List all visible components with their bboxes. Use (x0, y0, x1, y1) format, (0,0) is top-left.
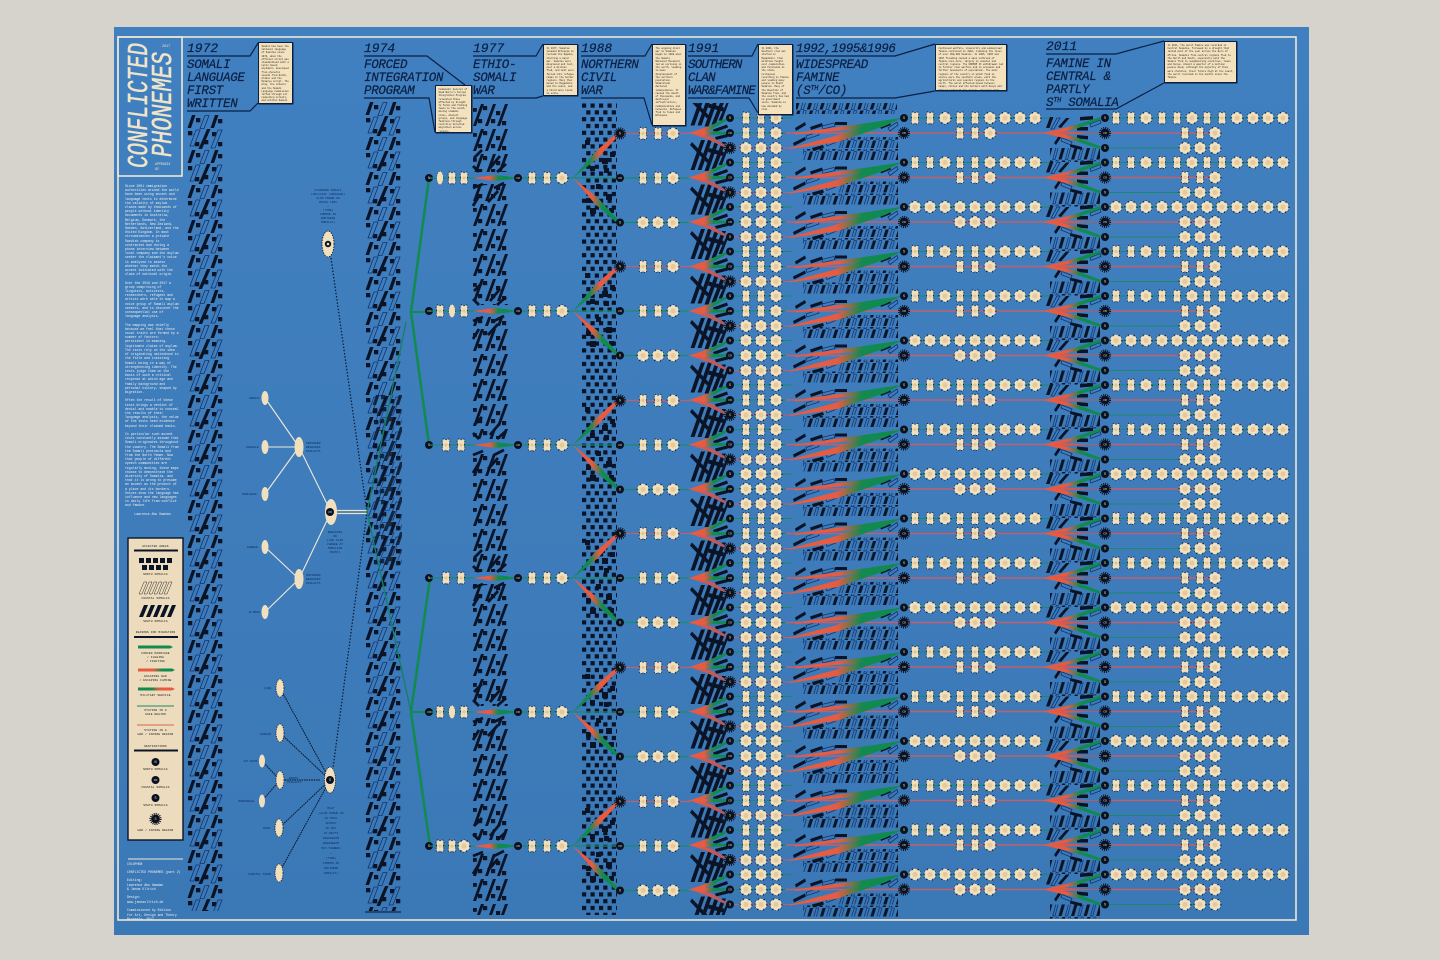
dialect tree: central and northern branches: BENAADIR (328, 531, 342, 534)
dialect tree: central and northern branches: SOMALIAN (328, 547, 342, 550)
legend panel: / FLEEING (147, 655, 164, 659)
dialect tree: Maay branch: MAAY (327, 807, 335, 810)
heading: 1972: 1972 (187, 41, 218, 56)
dialect tree: central and northern branches (242, 391, 367, 619)
dialect tree: Maay branch (238, 679, 344, 882)
legend panel: COASTAL SOMALIA (141, 597, 170, 600)
dialect tree: Maay branch: MUDDOWALE (238, 800, 254, 803)
column: 1974 pattern (365, 102, 402, 912)
column: 1977 pattern (472, 103, 508, 915)
heading: 1974: INTEGRATION (364, 71, 444, 85)
dialect tree: central and northern branches: COAST) (330, 550, 341, 554)
dialect: standard Somali: MAXAA TIRI (319, 201, 337, 204)
dialect tree: Maay branch: SOMALIA) (324, 871, 338, 875)
introduction text: Over the 2016 and 2017 a group comprising of linguists, activists, researchers, refugees and artists were able to map a voice group of Somali asylum seekers, and to discover the consequential use of language analysis. (125, 281, 179, 318)
colophon text: Editing: (127, 878, 142, 882)
introduction text: The mapping was chiefly because we feel that these vocal traits are formed by a number of factors: persistent in meaning-legitimate claims of asylum. The tests rely on the idea of originating nationhood in the field and insisting Somali being in a way of strengthening identity. The tests judge them on the basis of such a critical response at which age and family background and personal history, shaped by migration. (125, 323, 179, 394)
introduction text: Often the result of these tests brings a verdict of denial and unable to conceal the results of their language analysis, the value of the tests need evidence beyond their claimed basis. (125, 398, 179, 428)
migration fans: 1992, 1995 and 1996 (786, 111, 1050, 916)
heading: 1988: CIVIL (581, 71, 617, 85)
legend panel: WAR / FAMINE REGION (138, 828, 174, 832)
heading: 2011: SOMALIA (1061, 96, 1119, 110)
migration branches: 1977 and 1988 (430, 126, 690, 896)
heading: 1977: ETHIO- (473, 58, 516, 72)
dialect tree: Maay branch: COMMON IN (323, 862, 339, 865)
dialect: standard Somali (311, 189, 367, 768)
dialect tree: central and northern branches: DARLUGAN (242, 493, 257, 496)
heading: 1988 (581, 41, 652, 125)
dialect tree: Maay branch: (ALSO KNOWN AS (318, 811, 344, 815)
dialect tree: central and northern branches: BENAADIR (306, 578, 321, 581)
dialect tree: Maay branch: BANTU (289, 777, 298, 780)
heading: 2011: 2011 (1046, 39, 1077, 54)
dialect tree: central and northern branches: CHANGE AT (327, 543, 343, 546)
poster background (114, 27, 1309, 935)
legend panel: WAR / FAMINE REGION (138, 732, 174, 736)
dialect: standard Somali: (OFFICIAL LANGUAGE) (311, 192, 345, 196)
heading: 1988: WAR (581, 84, 603, 98)
note: 1988: The ongoing civil war in Somalia began in 1988 when the Somali National Movement led an uprising in the north, leading to mass displacement of the northern population. Somaliland declared independence. It caused the death of thousands, and destroyed infrastructure, communication and networks. Refugees fled to Yemen and Ethiopia. (656, 47, 681, 117)
column: 1991 pattern (689, 103, 730, 915)
heading: 1992, 1995 and 1996 (796, 42, 935, 98)
legend panel: SOUTH SOMALIA (143, 804, 168, 807)
introduction text: Since 2001 immigration authorities around the world have been using accent and language tests to determine the validity of asylum claims made by thousands of people without identity documents in Australia, Belgium, Denmark, the Netherlands, New Zealand, Sweden, Switzerland, and the United Kingdom. In most circumstances a private Swedish company is contracted and during a phone interview between local company and the asylum seeker the claimant's voice is analysed to assess whether they match the accent indicated with the claim of national origin. (125, 184, 179, 276)
heading: 1972: SOMALI (187, 58, 231, 72)
colophon text: COLOPHON (127, 862, 142, 866)
colophon text: CONFLICTED PHONEMES (part 2) (127, 870, 181, 874)
title block (118, 37, 182, 176)
migration fans: 1991 (688, 111, 792, 910)
dialect: standard Somali: COMMON IN (320, 213, 336, 216)
legend panel: NORTH SOMALIA (143, 573, 168, 576)
dialect tree: Maay branch: SOUTHERN (324, 867, 338, 870)
legend panel: COASTAL SOMALIA (141, 786, 170, 789)
note: 1977: In 1977, Somalia invaded Ethiopia to reclaim the Ogaden, starting a major war. Somalis were displaced and lost, over a million fled, and most were forced into refugee camps in the border regions. Many then moved to Mogadishu and the coast, and a third more lived in exile. (546, 47, 574, 95)
heading: 1974: PROGRAM (364, 84, 415, 98)
legend panel: STAYING IN A (144, 729, 167, 732)
heading: 1977: WAR (473, 84, 495, 98)
legend panel: MILITARY SERVICE (140, 694, 171, 697)
colophon text: Design: (127, 895, 140, 899)
legend panel: SOUTH SOMALIA (143, 620, 168, 623)
colophon text: for Art, Design and Theory (127, 913, 177, 917)
heading: 1977 (473, 41, 543, 98)
migration fans: 2011 (1043, 111, 1289, 918)
dialect tree: central and northern branches: DIALECTS (306, 582, 321, 585)
colophon text: www.jannaullrich.de (127, 900, 163, 904)
migration trunk lines (367, 178, 430, 846)
colophon text: Commissioned by Edition (127, 908, 171, 912)
dialect tree: Maay branch: JIT-NUUS (243, 760, 258, 763)
heading: 1974: 1974 (364, 41, 395, 56)
heading: 1992, 1995 and 1996: (S (796, 84, 810, 98)
heading: 1974: FORCED (364, 58, 408, 72)
heading: 1991: SOUTHERN (688, 58, 743, 72)
dialect tree: central and northern branches: B.MOGO (249, 611, 260, 614)
introduction text (125, 184, 179, 516)
dialect tree: central and northern branches: GARBAD (247, 546, 258, 549)
heading: 2011 (1046, 39, 1164, 110)
heading: 2011: S (1046, 96, 1053, 110)
dialect: standard Somali: SOMALIA) (321, 220, 335, 224)
heading: 1991: WAR&FAMINE (688, 84, 756, 98)
dialect: standard Somali: ALSO KNOWN AS (316, 197, 340, 200)
dialect tree: Maay branch: AFMAAY (326, 822, 337, 825)
legend panel: SAFE REGION (145, 713, 166, 716)
dialect tree: Maay branch: AF-MAY (326, 827, 337, 830)
column: 1992 top bars (796, 103, 897, 114)
dialect tree: Maay branch: GARAAD (260, 733, 271, 736)
legend panel: REASONS FOR MIGRATION (136, 631, 175, 634)
dialect tree: Maay branch: LUUQ (264, 687, 271, 690)
legend panel: FORCED MARRIAGE (141, 652, 170, 655)
heading: 1972: WRITTEN (187, 97, 238, 111)
dialect tree: Maay branch: AF-MAAY (325, 817, 337, 820)
heading: 2011: PARTLY (1046, 83, 1091, 97)
poster frame (118, 37, 1296, 920)
dialect: standard Somali: NORTHERN (321, 217, 335, 220)
heading: 1974 (364, 41, 465, 132)
heading: 1977: SOMALI (473, 71, 517, 85)
heading: 1991: 1991 (688, 41, 719, 56)
accent glyph rows after first node (435, 171, 470, 853)
first nodes (425, 174, 433, 850)
heading: 2011: TH (1053, 97, 1062, 105)
dialect tree: central and northern branches: NORTHERN (306, 442, 321, 445)
legend panel: NORTH SOMALIA (143, 768, 168, 771)
dialect tree: central and northern branches: SOUTHERN (306, 574, 321, 577)
heading: 1992, 1995 and 1996: TH (810, 85, 819, 93)
title block: 02 (155, 167, 159, 171)
legend panel (128, 538, 183, 840)
dialect tree: Maay branch: COASTAL TUNNI (248, 873, 272, 876)
legend panel: / ESCAPING FAMINE (139, 678, 172, 682)
dialect tree: Maay branch: AF-REYTI (324, 832, 338, 835)
introduction text: In particular such accent tests constantly assume that Somali originates throughout the country. The Somali from the Somali peninsula and from the North Yemen. Now that people of different speech communities are regularly moving, these maps choose to demonstrate the diversity of Somalia, and that it is wrong to presume an accent as the product of a place and its borders. Voices show the language has influence and new languages in daily life from conflict and famine. (125, 432, 179, 507)
title block: PHONEMES (147, 52, 180, 157)
note: 1974: Commander General of Siad Barre's Forced Integration Program relocated those affected by drought to farms and fishing towns in the south, mixing nomadic clans, dialect groups, and language families through centrally directed migration across regions. (438, 88, 467, 133)
heading: 1972: FIRST (187, 84, 224, 98)
legend panel: AFFECTED AREAS (142, 545, 169, 548)
dialect tree: Maay branch: — (329, 852, 332, 855)
heading: 1992, 1995 and 1996: 1992,1995&1996 (796, 42, 896, 56)
heading: 1992, 1995 and 1996: /CO) (818, 84, 847, 98)
dialect: standard Somali: STANDARD SOMALI (314, 189, 342, 192)
dialect tree: Maay branch: (TIME) (326, 856, 337, 860)
heading: 1992, 1995 and 1996: FAMINE (796, 71, 840, 85)
colophon text: Lawrence Abu Hamdan (127, 883, 163, 887)
title block: 2017 (162, 45, 171, 49)
colophon text: & Janna Ullrich (127, 887, 156, 891)
heading: 1972: LANGUAGE (187, 71, 245, 85)
dialect tree: central and northern branches: (CAN ALSO (327, 538, 343, 542)
colophon text (127, 862, 181, 921)
dialect tree: Maay branch: RAHANWEYN (323, 837, 339, 840)
dialect: standard Somali: — (326, 205, 329, 208)
dialect tree: central and northern branches: DIALECTS (306, 450, 321, 453)
legend panel: ESCAPING WAR (144, 675, 167, 678)
colophon rule (128, 858, 183, 860)
legend panel: DESTINATIONS (144, 745, 167, 748)
dialect tree: central and northern branches: UROAVI (249, 397, 260, 400)
note: 1991: In 1991, the Southern clan war started in Mogadishu. Clan militias fought over communities and farmlands as the state collapsed, resulting in famine and leading many people to South Somalia. Many of the Republic of Somalia fled, and the country has had no government since. Somalia is now divided by clan. (762, 47, 789, 111)
heading: 1991: CLAN (688, 71, 716, 85)
note: 1988 (652, 44, 686, 126)
heading: 1991 (688, 41, 758, 113)
heading: 1988: NORTHERN (581, 58, 639, 72)
heading: 1988: 1988 (581, 41, 612, 56)
column: 1972 pattern (187, 115, 223, 911)
note: 2011: In 2011, the worst famine was recorded in Central Somalia, followed by a drought that lasted most of the year across the Horn of Africa. Somalis from central regions fled to the North and South, especially with the Somali fled to neighbouring countries, Yemen and Kenya. Almost a quarter of a million people died, although the majority of them were children, their future high at the coast, the worst recorded in the months since the famine. (1168, 44, 1234, 79)
heading: 2011: CENTRAL & (1046, 70, 1111, 84)
legend panel: / FIGHTING (146, 659, 165, 663)
colophon text: Brussels, 2017 (127, 917, 154, 921)
dialect tree: central and northern branches: BENAADIR (306, 446, 321, 449)
heading: 1972 (187, 41, 258, 111)
dialect tree: Maay branch: SAPO (263, 827, 270, 830)
dialect tree: Maay branch: RAHANWEYN (323, 842, 339, 845)
dialect tree: Maay branch: DIALECTS (287, 781, 302, 784)
introduction text: Lawrence Abu Hamdan (134, 512, 171, 516)
column: 1988 pattern (582, 103, 617, 915)
dialect tree: central and northern branches: OR (333, 535, 337, 538)
dialect: standard Somali: (TIME) (323, 208, 334, 212)
legend panel: STAYING IN A (144, 709, 167, 712)
heading: 2011: FAMINE IN (1046, 57, 1112, 71)
heading: 1977: 1977 (473, 41, 504, 56)
dialect tree: Maay branch: MAY-TUNBER) (321, 846, 341, 850)
title block: APPENDIX (154, 162, 171, 166)
dialect tree: central and northern branches: AUDAGLE (246, 446, 259, 449)
heading: 1992, 1995 and 1996: WIDESPREAD (796, 58, 869, 72)
